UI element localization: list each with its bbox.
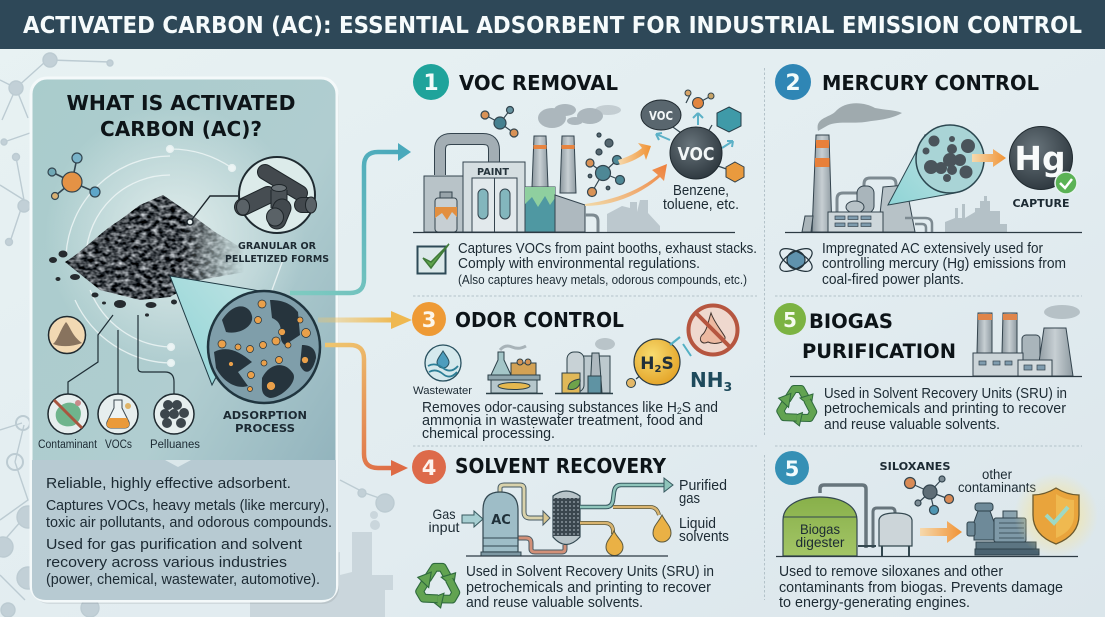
description: petrochemicals and printing to recover bbox=[466, 580, 711, 596]
heading: MERCURY CONTROL bbox=[822, 71, 1039, 95]
background factory silhouette bbox=[250, 511, 393, 617]
icon: VOC flask bbox=[98, 394, 138, 434]
concentric rings bbox=[66, 146, 283, 366]
section 4: solvent recovery bbox=[412, 450, 729, 611]
description: controlling mercury (Hg) emissions from bbox=[822, 256, 1066, 272]
arrow: to VOC removal bbox=[290, 143, 411, 293]
diagram: recovery process bbox=[462, 478, 673, 556]
badge 2: 2 bbox=[785, 71, 801, 96]
badge 4: 4 bbox=[422, 456, 436, 480]
compound label: toluene, etc. bbox=[663, 197, 739, 213]
badge 3 bbox=[412, 302, 446, 336]
description: Used in Solvent Recovery Units (SRU) in bbox=[824, 386, 1067, 402]
icon: molecule bbox=[48, 153, 100, 200]
illustration: smoke bbox=[538, 104, 621, 128]
H2S sphere: 2 bbox=[655, 364, 662, 375]
heading: ODOR CONTROL bbox=[455, 308, 624, 332]
NH3 label: NH bbox=[690, 368, 723, 392]
molecule: top bbox=[481, 106, 518, 137]
description: 2 bbox=[677, 406, 682, 416]
illustration: paint booth and stacks: PAINT bbox=[477, 167, 510, 178]
icon: contaminant bbox=[48, 394, 88, 434]
description: and reuse valuable solvents. bbox=[824, 417, 1000, 433]
pellet label: GRANULAR OR bbox=[238, 241, 317, 252]
panel heading: CARBON (AC)? bbox=[100, 117, 262, 141]
adsorption label: PROCESS bbox=[235, 422, 295, 435]
description: Captures VOCs from paint booths, exhaust stacks. bbox=[458, 241, 757, 257]
arrow: to engine bbox=[920, 521, 962, 543]
description: to energy-generating engines. bbox=[779, 595, 970, 611]
adsorption label bbox=[223, 409, 307, 435]
pellet label: PELLETIZED FORMS bbox=[225, 254, 329, 265]
diagram labels: input bbox=[428, 519, 460, 535]
connector lines bbox=[68, 315, 174, 394]
baseline bbox=[790, 376, 1082, 378]
H2S sphere bbox=[626, 337, 691, 388]
panel description: recovery across various industries bbox=[46, 554, 287, 571]
heading: SOLVENT RECOVERY bbox=[455, 454, 666, 478]
description: (Also captures heavy metals, odorous compounds, etc.) bbox=[458, 272, 747, 287]
icon: chemical plant bbox=[555, 338, 615, 394]
icon: pellets bbox=[236, 172, 316, 226]
icon: no odor bbox=[688, 306, 738, 354]
VOC compounds bbox=[641, 90, 744, 182]
magnifier: adsorption process bbox=[170, 276, 320, 403]
panel description: Captures VOCs, heavy metals (like mercury), bbox=[46, 498, 329, 514]
illustration: digester: Biogas bbox=[800, 522, 840, 537]
diagram labels: gas bbox=[679, 491, 700, 507]
illustration: digester bbox=[783, 485, 912, 556]
VOC compounds: VOC bbox=[678, 144, 714, 165]
section 5: biogas purification bbox=[774, 303, 1082, 433]
diagram labels: Gas bbox=[432, 506, 456, 522]
description: S and bbox=[682, 400, 718, 416]
description: ammonia in wastewater treatment, food and bbox=[422, 413, 703, 429]
icon: atom bbox=[776, 244, 816, 276]
VOC compounds: VOC bbox=[649, 109, 673, 123]
panel description: Reliable, highly effective adsorbent. bbox=[46, 475, 291, 492]
description: and reuse valuable solvents. bbox=[466, 595, 643, 611]
baseline bbox=[776, 556, 1078, 558]
illustration: plant bbox=[973, 305, 1080, 376]
capture label: CAPTURE bbox=[1012, 197, 1070, 210]
badge 2 bbox=[775, 64, 811, 100]
description bbox=[422, 400, 718, 442]
illustration: factory silhouette bbox=[945, 196, 1007, 232]
description: petrochemicals and printing to recover bbox=[824, 401, 1066, 417]
diagram labels: solvents bbox=[679, 529, 729, 545]
Hg sphere: Hg bbox=[1014, 139, 1066, 178]
siloxanes label: SILOXANES bbox=[880, 460, 951, 473]
badge 5 blue bbox=[775, 451, 809, 485]
icon: wastewater bbox=[413, 345, 472, 397]
pellet label bbox=[225, 241, 329, 265]
badge 1 bbox=[413, 64, 449, 100]
illustration: engine bbox=[967, 503, 1039, 555]
panel heading bbox=[66, 91, 296, 141]
badge 5 green bbox=[774, 303, 806, 335]
source labels: VOCs bbox=[105, 439, 132, 451]
baseline bbox=[785, 232, 1082, 234]
H2S sphere: H bbox=[640, 354, 655, 374]
source labels: Contaminant bbox=[38, 439, 98, 451]
description bbox=[824, 386, 1067, 433]
description: Used to remove siloxanes and other bbox=[779, 564, 1003, 580]
H2S sphere: S bbox=[661, 354, 674, 374]
heading: PURIFICATION bbox=[802, 340, 956, 363]
description: Removes odor-causing substances like H bbox=[422, 400, 685, 416]
icon: recycle bbox=[774, 389, 817, 428]
contaminants label: other bbox=[982, 467, 1012, 482]
diagram labels: Liquid bbox=[679, 516, 716, 532]
molecule: centre bbox=[586, 133, 624, 196]
icon: ash source bbox=[48, 316, 86, 354]
section 6: siloxane removal bbox=[775, 451, 1098, 611]
icon: wastewater: Wastewater bbox=[413, 385, 472, 397]
heading bbox=[802, 310, 956, 363]
contaminants label bbox=[958, 467, 1036, 495]
pellets callout bbox=[187, 157, 316, 233]
panel description bbox=[32, 460, 336, 600]
heading: VOC REMOVAL bbox=[459, 71, 618, 95]
illustration: paint booth and stacks bbox=[424, 136, 598, 232]
badge 3: 3 bbox=[422, 308, 436, 332]
description: Impregnated AC extensively used for bbox=[822, 241, 1043, 257]
background molecular network bbox=[0, 53, 394, 617]
panel: what is activated carbon bbox=[31, 78, 339, 604]
adsorption label: ADSORPTION bbox=[223, 409, 307, 422]
panel heading: WHAT IS ACTIVATED bbox=[66, 91, 296, 115]
diagram labels bbox=[428, 478, 729, 545]
description bbox=[779, 564, 1063, 611]
icon: shield bbox=[1014, 473, 1098, 557]
arrows: emissions bbox=[585, 143, 667, 206]
diagram: recovery process: AC bbox=[491, 513, 511, 528]
description bbox=[466, 564, 714, 611]
Hg sphere bbox=[1010, 126, 1077, 194]
source labels: Pelluanes bbox=[150, 439, 200, 451]
icon: recycle bbox=[413, 567, 460, 611]
panel description: Used for gas purification and solvent bbox=[46, 536, 303, 553]
panel description: toxic air pollutants, and odorous compounds. bbox=[46, 515, 332, 531]
description bbox=[458, 241, 757, 287]
description bbox=[822, 241, 1066, 288]
diagram labels: Purified bbox=[679, 478, 727, 494]
description: Comply with environmental regulations. bbox=[458, 256, 700, 272]
molecule: siloxane bbox=[904, 476, 954, 514]
badge 4 bbox=[412, 450, 446, 484]
arrow: to odor control bbox=[318, 311, 412, 329]
NH3 label: 3 bbox=[723, 379, 732, 394]
description: coal-fired power plants. bbox=[822, 272, 964, 288]
arrow: to solvent recovery bbox=[325, 345, 408, 476]
icon: pellet cluster bbox=[154, 394, 194, 434]
badge 5 green: 5 bbox=[783, 308, 797, 332]
icon: checkbox bbox=[418, 244, 449, 274]
heading: BIOGAS bbox=[809, 310, 893, 333]
compound label bbox=[663, 183, 739, 213]
source labels bbox=[38, 439, 200, 451]
badge 5 blue: 5 bbox=[785, 457, 799, 481]
icon: food processing bbox=[486, 346, 543, 394]
description: Used in Solvent Recovery Units (SRU) in bbox=[466, 564, 714, 580]
badge 1: 1 bbox=[423, 71, 439, 96]
illustration: digester: digester bbox=[796, 535, 845, 550]
section 3: odor control bbox=[412, 302, 738, 442]
compound label: Benzene, bbox=[673, 183, 729, 199]
header bar bbox=[0, 0, 1105, 49]
illustration: power plant bbox=[802, 103, 932, 232]
arrow: to mercury bbox=[972, 149, 1006, 167]
illustration: factory silhouette bbox=[607, 200, 660, 232]
baseline bbox=[413, 232, 735, 234]
carbon pile bbox=[49, 195, 245, 317]
description: chemical processing. bbox=[422, 426, 555, 442]
panel description: (power, chemical, wastewater, automotive). bbox=[46, 572, 320, 588]
section 1: VOC removal bbox=[413, 64, 757, 287]
magnified carbon bbox=[888, 125, 984, 205]
section 2: mercury control bbox=[775, 64, 1082, 288]
description: contaminants from biogas. Prevents damage bbox=[779, 580, 1063, 596]
contaminants label: contaminants bbox=[958, 480, 1036, 495]
section dividers bbox=[413, 68, 1082, 600]
